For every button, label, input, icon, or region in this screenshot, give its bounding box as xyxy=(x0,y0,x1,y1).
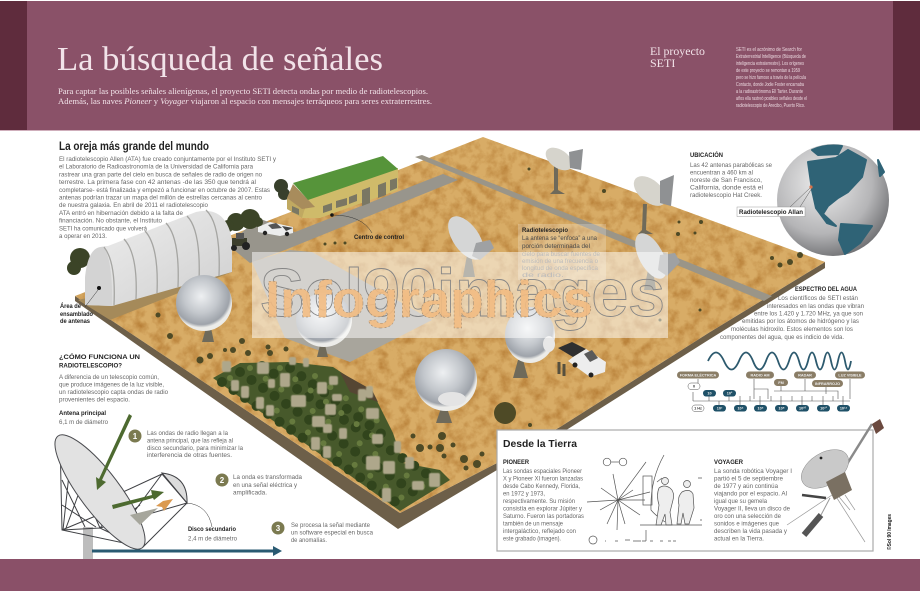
intro text: Para captar las posibles señales alienígenas, el proyecto SETI detecta ondas por medio de radiotelescopios. xyxy=(58,87,428,96)
tractor xyxy=(231,233,250,251)
dish 3 xyxy=(415,349,477,411)
text: Espectro del agua: interesados en las ondas que vibran xyxy=(767,303,864,310)
heading: El proyecto SETI: El proyecto xyxy=(650,44,705,58)
step 3: 3 xyxy=(276,524,281,533)
step 2: amplificada. xyxy=(233,490,267,496)
hangar xyxy=(78,210,232,320)
step 2: 2 xyxy=(220,476,225,485)
dish 2 xyxy=(296,293,352,347)
Pioneer plaque xyxy=(587,455,702,544)
step 1: disco secundario, para minimizar la xyxy=(147,445,243,452)
tan pills xyxy=(677,372,865,387)
spectrum chart: INFRARROJO xyxy=(815,382,840,386)
arrow: signal xyxy=(156,499,173,511)
title: La búsqueda de señales xyxy=(57,41,383,78)
text: Pioneer xyxy=(503,459,585,542)
text: Espectro del agua: ESPECTRO DEL AGUA xyxy=(795,286,857,293)
text: SETI description: radiotelescopio de Arecibo, Puerto Rico. xyxy=(736,103,805,109)
dish antennas xyxy=(176,143,680,423)
spectrum chart: 1 Hz xyxy=(694,406,702,410)
arrow: signal path xyxy=(92,546,282,556)
spectrum chart: 10⁶ xyxy=(758,406,764,410)
heading: Desde la Tierra xyxy=(503,438,577,450)
dish 5 xyxy=(441,210,494,266)
text: Espectro del agua: Los científicos de SETI están xyxy=(778,295,858,302)
text: Allen telescope: El radiotelescopio Allen (ATA) fue creado conjuntamente por el Instituto SETI y xyxy=(59,156,277,163)
watermark: Sol90images xyxy=(260,255,665,331)
text: Voyager: de 1977 y aún continúa xyxy=(714,483,778,490)
arrow: incoming wave xyxy=(96,414,132,490)
text: Allen telescope: antenas podrían trazar un mapa del millón de estrellas cercanas al centro xyxy=(59,194,262,202)
spectrum chart: 10¹⁴ xyxy=(840,406,847,410)
text: Ubicación: encuentran a 460 km al xyxy=(690,170,753,176)
text: Voyager: partió el 5 de septiembre xyxy=(714,476,783,482)
label: Radiotelescopio Allan: Radiotelescopio Allan xyxy=(739,209,803,216)
text: Espectro del agua: emitidas por los átomos de hidrógeno y las xyxy=(742,318,860,325)
building: control centre xyxy=(274,156,398,218)
spectrum chart: 10¹⁰ xyxy=(799,406,806,410)
text: Ubicación: California, donde está el xyxy=(690,184,764,192)
spectrum chart: RADIO AM xyxy=(750,374,770,378)
dish 6 xyxy=(629,228,680,284)
Voyager probe xyxy=(787,419,884,542)
step 1: 1 xyxy=(133,432,138,441)
text: how a radio telescope works: Antena principal xyxy=(59,410,106,417)
spectrum chart: FORMA ELÉCTRICA xyxy=(680,372,717,378)
label: Área de ensamblado: ensamblado xyxy=(60,311,93,318)
text: Voyager: actual en la Tierra. xyxy=(714,536,764,542)
text: Allen telescope: completarse- está finalizada y empezó a funcionar en octubre de 2007. Estas xyxy=(59,187,271,194)
heading: El proyecto SETI xyxy=(650,44,705,70)
spectrum chart: 10³ xyxy=(717,406,723,410)
text: SETI description: Extraterrestrial Intelligence (Búsqueda de xyxy=(736,54,806,60)
text: how a radio telescope works: ¿CÓMO FUNCIONA UN xyxy=(59,352,140,361)
trees behind vehicles xyxy=(67,209,263,275)
dish 4 xyxy=(505,307,555,363)
text: Pioneer: en 1972 y 1973, xyxy=(503,490,545,498)
arrow: reflected wave xyxy=(112,490,164,509)
teal pills xyxy=(703,390,850,412)
text: Pioneer: PIONEER xyxy=(503,459,529,466)
text: how a radio telescope works: que produce imágenes de la luz visible, xyxy=(59,382,164,388)
dish 1 xyxy=(176,275,232,331)
callout: Radiotelescopio: longitud de onda específica xyxy=(522,265,598,272)
text: SETI description: de este proyecto se remontan a 1959 xyxy=(736,68,800,74)
text: Pioneer: Saturno. Fueron las portadoras xyxy=(503,513,585,520)
credit: ©Sol 90 Images xyxy=(886,514,893,550)
text: SETI description: a la radioastrónoma Ell Tarter. Durante xyxy=(736,89,803,95)
text: how a radio telescope works: RADIOTELESCOPIO? xyxy=(59,362,122,370)
step 3 xyxy=(272,522,373,544)
spectrum chart: FM xyxy=(778,381,784,385)
text: Allen telescope: ATA entró en hibernación debido a la falta de xyxy=(59,210,183,217)
header band xyxy=(0,1,920,131)
callout: Radiotelescopio: porción determinada del xyxy=(522,243,591,250)
callout: Radiotelescopio xyxy=(518,224,606,280)
step 1: interferencia de otras fuentes. xyxy=(147,452,232,459)
text: Allen telescope: a operar en 2013. xyxy=(59,233,107,240)
text: Voyager: oro con una selección de xyxy=(714,513,781,520)
text: how a radio telescope works: 6,1 m de diámetro xyxy=(59,419,108,426)
text: Pioneer: X y Pioneer XI fueron lanzadas xyxy=(503,476,584,482)
step 2 xyxy=(216,474,302,496)
step 3: de anomalías. xyxy=(291,537,327,544)
pickup truck large xyxy=(558,342,606,378)
spectrum chart xyxy=(677,352,865,412)
text: Voyager: describen la vida pasada y xyxy=(714,528,788,535)
text: Voyager: sonidos e imágenes que xyxy=(714,520,779,528)
roads xyxy=(415,155,772,301)
dish 8 xyxy=(542,143,583,175)
step 1 xyxy=(128,430,243,459)
text: Voyager: Voyager II, lleva un disco de xyxy=(714,506,790,512)
panel: Desde la Tierra xyxy=(497,430,873,551)
step 3: un software especial en busca xyxy=(291,530,373,536)
text: Espectro del agua: entre los 1.420 y 1.720 MHz, ya que son xyxy=(754,310,863,318)
text: Pioneer: también de un mensaje xyxy=(503,520,563,528)
text: Allen telescope: de nuestra galaxia. En abril de 2011 el radiotelescopio xyxy=(59,202,208,209)
text: SETI description: inteligencia extraterrestre). Los orígenes xyxy=(736,61,804,67)
step 1: antena principal, que las refleja al xyxy=(147,438,233,444)
shrubs xyxy=(156,168,803,470)
text: Ubicación xyxy=(690,150,772,199)
spectrum chart: RADAR xyxy=(798,374,812,378)
spectrum chart: 10⁴ xyxy=(737,406,744,410)
text: Ubicación: Las 42 antenas parabólicas se xyxy=(690,162,772,169)
dish 7 xyxy=(628,170,674,212)
label: Área de ensamblado xyxy=(60,286,101,325)
forest xyxy=(213,357,450,511)
text: Pioneer: Las sondas espaciales Pioneer xyxy=(503,468,583,475)
text: how a radio telescope works: A diferencia de un telescopio común, xyxy=(59,374,159,381)
text: Espectro del agua xyxy=(720,286,864,341)
text: Ubicación: noreste de San Francisco, xyxy=(690,177,762,184)
intro text: Además, las naves Pioneer y Voyager viajaron al espacio con mensajes terráqueos para seres extraterrestres. xyxy=(58,97,432,106)
text: Pioneer: consistía en explorar Júpiter y xyxy=(503,506,583,512)
label: Centro de control xyxy=(330,213,404,241)
callout: Radiotelescopio: cielo para buscar fuentes de xyxy=(522,251,600,258)
text: Pioneer: respectivamente. Su misión xyxy=(503,498,575,505)
text: Allen telescope: el Laboratorio de Radioastronomía de la Universidad de California para xyxy=(59,164,253,171)
intro text xyxy=(58,87,432,106)
text: SETI description: Contacto, donde Jodie Foster encarnaba xyxy=(736,82,804,88)
telescope diagram xyxy=(42,414,212,560)
text: Voyager xyxy=(714,459,792,542)
text: SETI description: pero se hizo famoso a través de la película xyxy=(736,75,806,81)
scale xyxy=(693,379,850,405)
spectrum chart: 10¹² xyxy=(820,406,828,410)
step 1: Las ondas de radio llegan a la xyxy=(147,430,228,437)
globe xyxy=(737,144,889,256)
text: Voyager: igual que su gemela xyxy=(714,498,767,505)
text: Pioneer: intergaláctico, reflejado con xyxy=(503,528,576,535)
text: Espectro del agua: componentes del agua, que es indicio de vida. xyxy=(720,334,844,341)
text: how a radio telescope works: un radiotelescopio capta ondas de radio xyxy=(59,389,168,396)
text: how a radio telescope works xyxy=(59,352,168,426)
text: Allen telescope: financiación. No obstante, el Instituto xyxy=(59,218,162,225)
spectrum chart: 10⁸ xyxy=(778,406,785,410)
callout: Radiotelescopio: La antena se “enfoca” a una xyxy=(522,235,597,242)
text: Voyager: VOYAGER xyxy=(714,459,743,466)
beige clumps xyxy=(222,357,440,502)
text: Allen telescope: rastrear una gran parte del cielo en busca de señales de radio de origen no xyxy=(59,171,262,178)
text: SETI description: años ella rastreó posibles señales desde el xyxy=(736,96,807,102)
label: Área de ensamblado: de antenas xyxy=(60,318,90,325)
pickup truck small xyxy=(258,222,293,236)
step 2: La onda es transformada xyxy=(233,474,302,481)
text: Voyager: viajando por el espacio. Al xyxy=(714,490,787,498)
bottom band xyxy=(0,559,920,591)
spectrum chart: 0 xyxy=(693,384,695,388)
text: Ubicación: UBICACIÓN xyxy=(690,150,723,159)
label: Centro de control: Centro de control xyxy=(354,234,404,241)
heading: La oreja más grande del mundo: La oreja más grande del mundo xyxy=(59,141,209,153)
text: Pioneer: desde Cabo Kennedy, Florida, xyxy=(503,483,580,490)
label: Radiotelescopio Allan xyxy=(737,185,813,216)
label: Área de ensamblado: Área de xyxy=(60,301,81,310)
text: Allen telescope: terrestre. La primera fase con 42 antenas -de las 350 que tendrá al xyxy=(59,179,257,186)
label: Disco secundario xyxy=(188,526,237,542)
text: Espectro del agua: moléculas hidroxilo. Estos elementos son los xyxy=(731,326,854,333)
text: Allen telescope xyxy=(59,156,277,240)
terrain xyxy=(75,137,825,529)
callout: Radiotelescopio: Radiotelescopio xyxy=(522,227,568,234)
text: how a radio telescope works: provenientes del espacio. xyxy=(59,396,130,404)
wave xyxy=(708,352,851,370)
spectrum chart: 10² xyxy=(727,392,733,396)
text: Voyager: La sonda robótica Voyager I xyxy=(714,468,792,475)
text: Ubicación: radiotelescopio Hat Creek. xyxy=(690,192,762,199)
heading: El proyecto SETI: SETI xyxy=(650,56,675,70)
callout: Radiotelescopio: de radio. xyxy=(522,272,564,279)
spectrum chart: LUZ VISIBLE xyxy=(838,374,862,378)
text: SETI description xyxy=(736,47,807,109)
watermark: Infographics xyxy=(265,271,593,329)
label: Disco secundario: 2,4 m de diámetro xyxy=(188,536,237,542)
text: Allen telescope: SETI ha comunicado que volverá xyxy=(59,225,147,232)
step 3: Se procesa la señal mediante xyxy=(291,522,370,529)
callout: Radiotelescopio: emisión de una frecuencia o xyxy=(522,258,598,265)
step 2: en una señal eléctrica y xyxy=(233,482,298,489)
label: Disco secundario: Disco secundario xyxy=(188,526,236,533)
text: SETI description: SETI es el acrónimo de Search for xyxy=(736,47,802,53)
text: Pioneer: este grabado (imagen). xyxy=(503,536,561,542)
spectrum chart: 10 xyxy=(707,392,712,396)
